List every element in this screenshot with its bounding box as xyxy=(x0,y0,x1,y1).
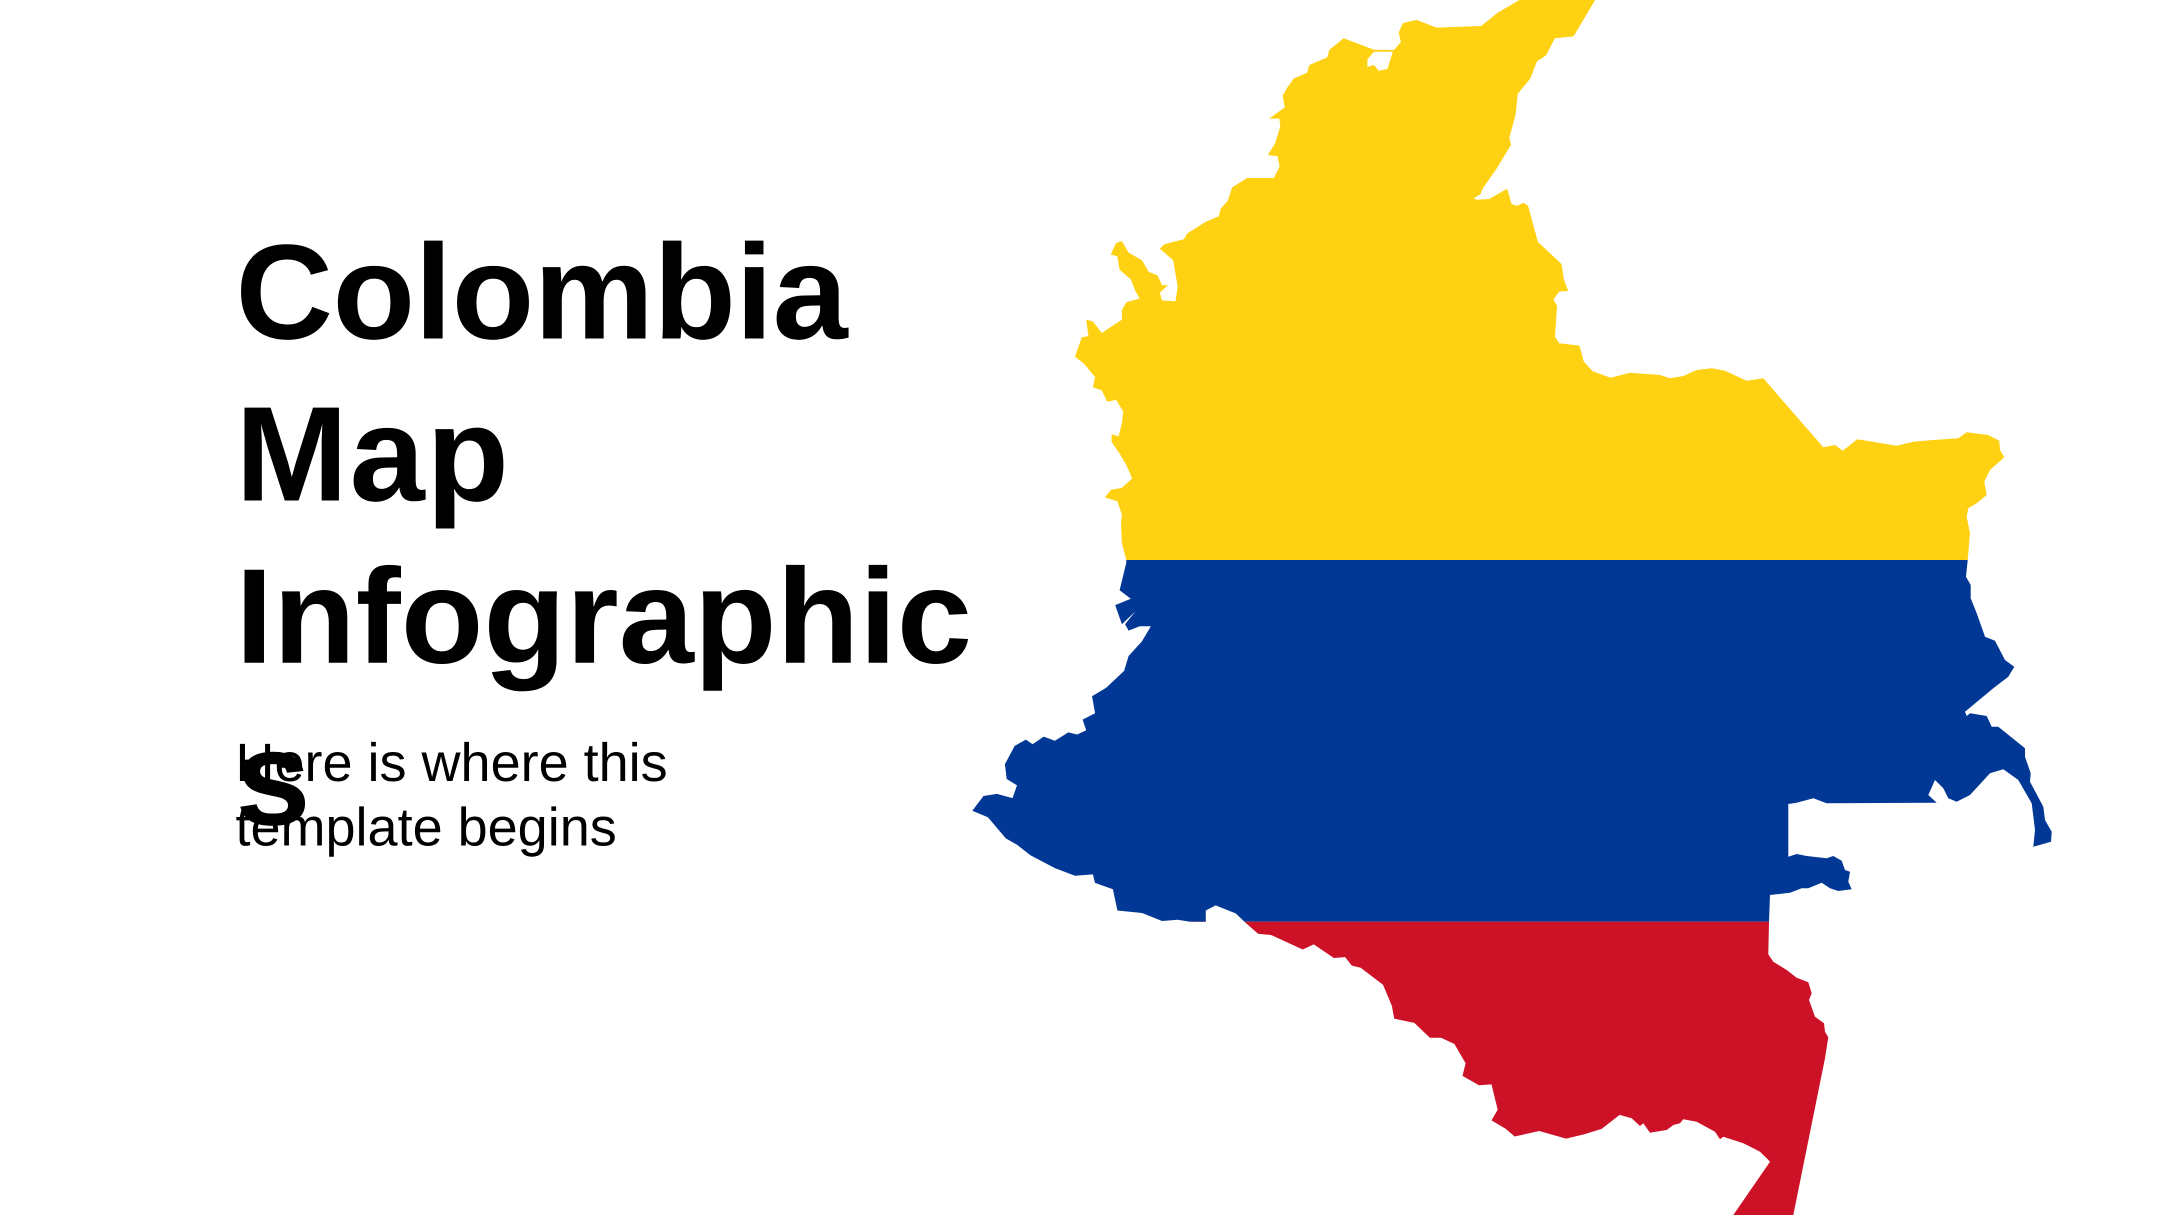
red flag stripe xyxy=(1189,922,1828,1215)
title: Map xyxy=(236,378,511,530)
subtitle xyxy=(236,733,668,858)
subtitle: Here is where this xyxy=(236,733,668,793)
subtitle: template begins xyxy=(236,798,617,858)
title: s xyxy=(236,702,311,854)
yellow flag stripe xyxy=(1075,0,2004,560)
map: Colombia silhouette filled with flag stripes xyxy=(950,0,2060,1215)
title: Infographic xyxy=(236,541,972,692)
title: Colombia xyxy=(236,216,849,368)
title xyxy=(236,216,972,854)
blue flag stripe xyxy=(950,560,2060,922)
